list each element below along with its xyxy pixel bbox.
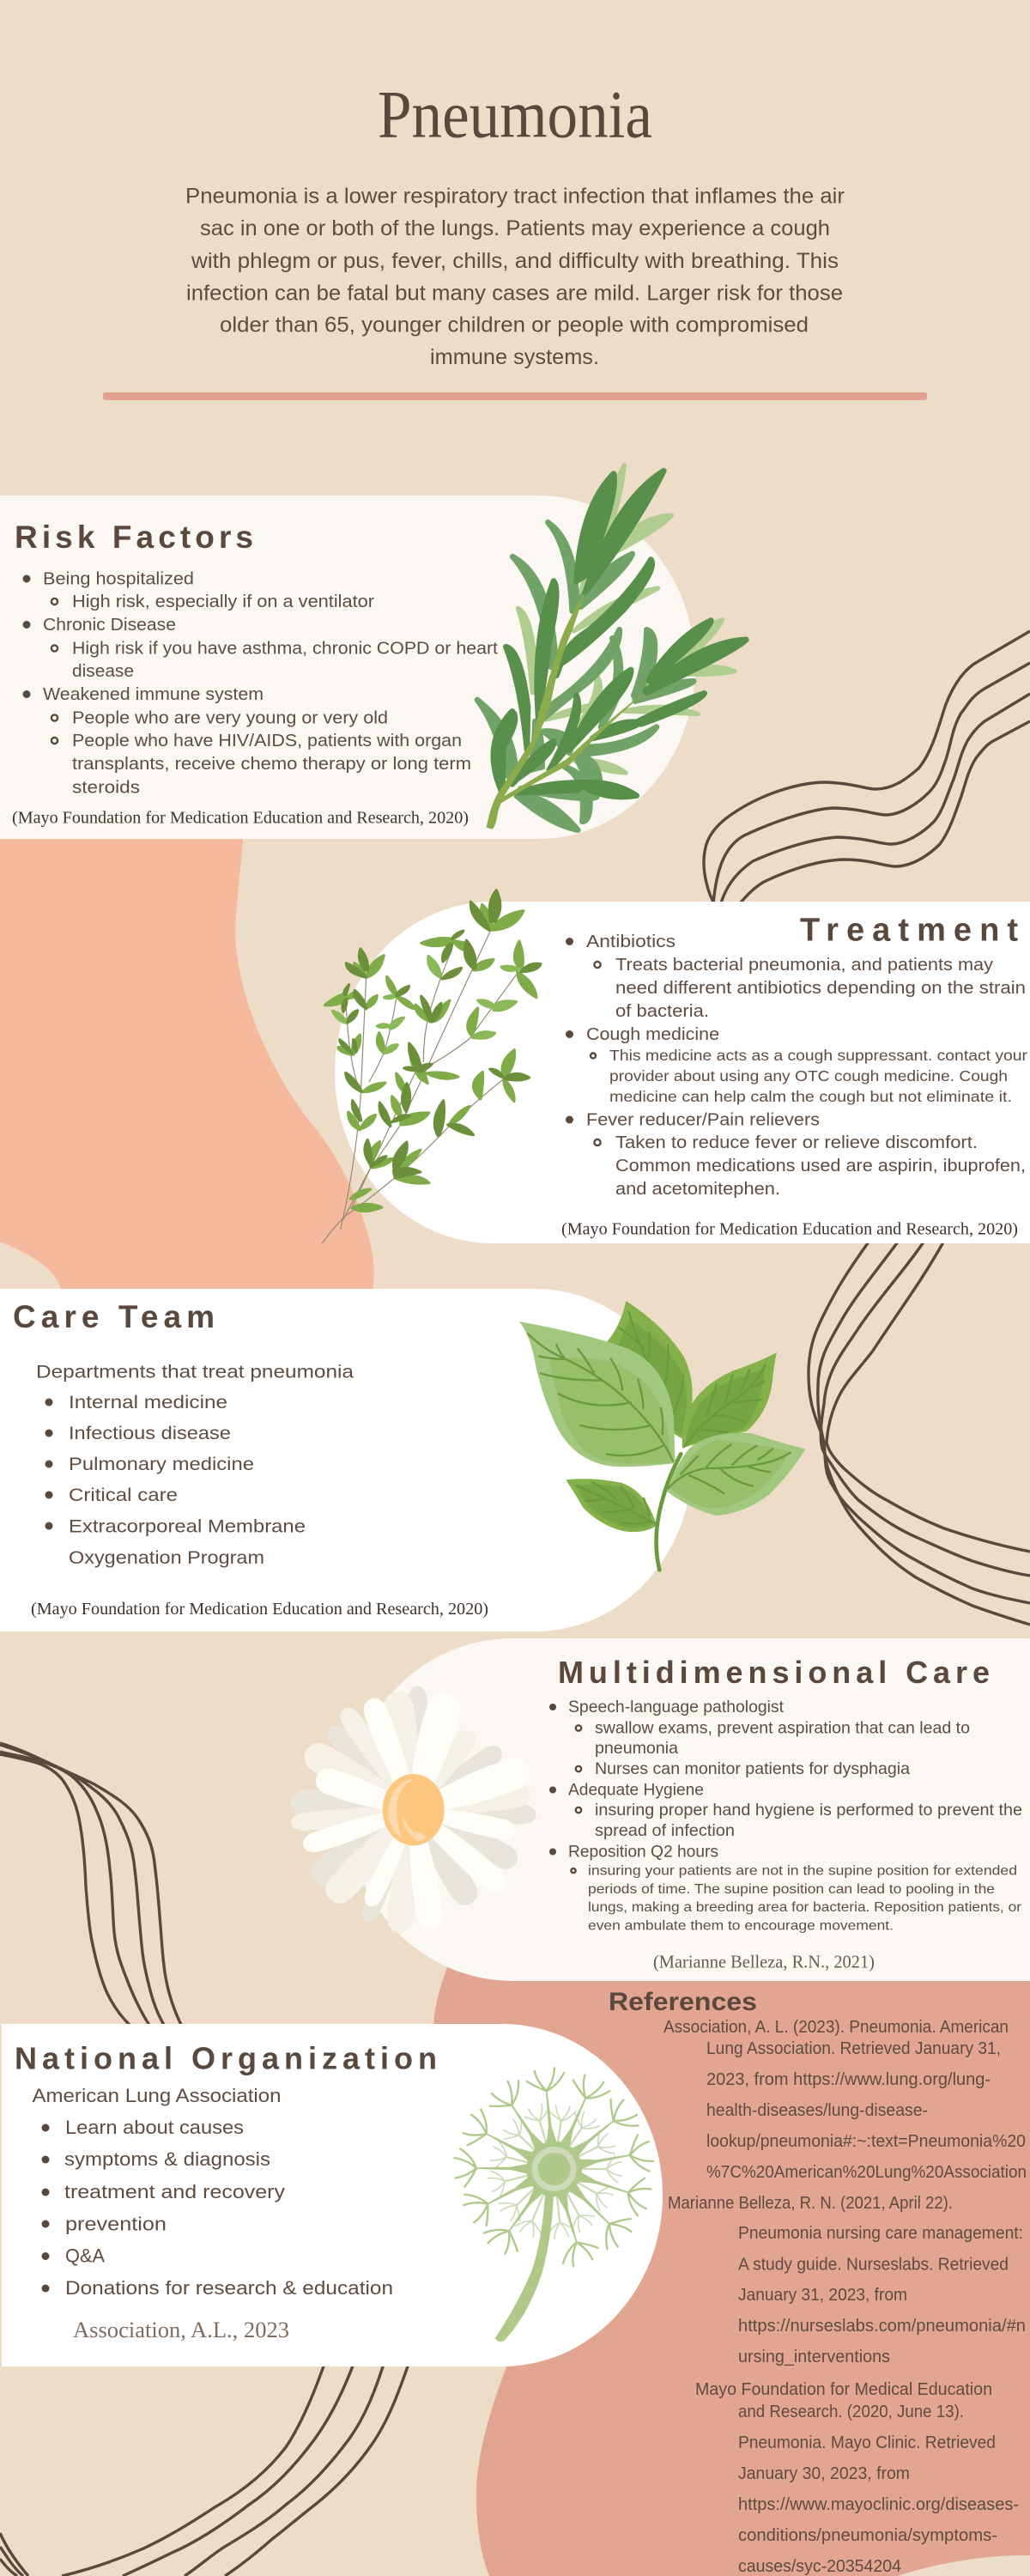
treatment list: medicine can help calm the cough but not eliminate it. [609, 1088, 1012, 1105]
care team list: Oxygenation Program [69, 1547, 264, 1568]
heading: care team: Care Team [13, 1299, 215, 1334]
multidimensional care list: Nurses can monitor patients for dysphagia [595, 1759, 910, 1778]
risk factors list: People who have HIV/AIDS, patients with organ [72, 732, 462, 750]
references list: lookup/pneumonia#:~:text=Pneumonia%20 [706, 2132, 1026, 2151]
references list: health-diseases/lung-disease- [706, 2101, 928, 2120]
intro paragraph: immune systems. [430, 345, 599, 369]
national organization list: treatment and recovery [64, 2181, 285, 2202]
heading: risk factors: Risk Factors [15, 519, 253, 555]
multidimensional care list: Speech-language pathologist [568, 1698, 785, 1716]
care team list: Critical care [69, 1485, 178, 1505]
panel: care team [0, 1289, 805, 1631]
national organization list: Learn about causes [65, 2117, 244, 2138]
risk factors list: High risk, especially if on a ventilator [72, 592, 374, 611]
decorative wavy lines: left [0, 1743, 182, 2026]
title: Pneumonia [378, 77, 652, 151]
panel background [0, 495, 695, 839]
references list: causes/syc-20354204 [738, 2557, 901, 2576]
panel: national organization [2, 2024, 663, 2366]
panel background [2, 2024, 663, 2366]
treatment list: of bacteria. [615, 1002, 709, 1021]
care team list: Departments that treat pneumonia [36, 1362, 354, 1382]
care team list: Internal medicine [69, 1392, 227, 1413]
icon: thyme sprig [322, 890, 541, 1243]
citation: national organization: Association, A.L., 2023 [73, 2318, 289, 2342]
multidimensional care list: lungs, making a breeding area for bacteria. Reposition patients, or [588, 1900, 1022, 1915]
risk factors list: People who are very young or very old [72, 709, 388, 728]
panel: multidimensional care [290, 1638, 1030, 1981]
treatment list: Cough medicine [586, 1025, 719, 1044]
treatment list: Treats bacterial pneumonia, and patients may [615, 956, 993, 975]
references list: Lung Association. Retrieved January 31, [706, 2039, 1001, 2058]
references list: ursing_interventions [738, 2348, 890, 2366]
multidimensional care list: Adequate Hygiene [568, 1781, 704, 1800]
intro paragraph: sac in one or both of the lungs. Patients may experience a cough [200, 216, 830, 240]
intro paragraph: infection can be fatal but many cases are mild. Larger risk for those [186, 282, 843, 306]
risk factors list: Chronic Disease [43, 616, 176, 635]
treatment list: Fever reducer/Pain relievers [586, 1111, 820, 1130]
risk factors list: steroids [72, 778, 140, 797]
references list: Pneumonia nursing care management: [738, 2224, 1023, 2243]
risk factors list: transplants, receive chemo therapy or long term [72, 755, 471, 774]
intro paragraph: with phlegm or pus, fever, chills, and difficulty with breathing. This [191, 249, 839, 273]
intro paragraph: older than 65, younger children or people with compromised [220, 313, 809, 337]
risk factors list: Weakened immune system [43, 685, 264, 704]
care team list: Extracorporeal Membrane [69, 1516, 306, 1537]
references list: January 31, 2023, from [738, 2286, 907, 2305]
intro paragraph: Pneumonia is a lower respiratory tract infection that inflames the air [185, 185, 845, 209]
references list: https://nurseslabs.com/pneumonia/#n [738, 2317, 1026, 2336]
panel: risk factors [0, 465, 746, 839]
citation: risk factors: (Mayo Foundation for Medication Education and Research, 2020) [12, 810, 469, 828]
references list: Mayo Foundation for Medical Education [695, 2380, 992, 2399]
decorative wavy lines: lower left [0, 2361, 409, 2576]
citation: treatment: (Mayo Foundation for Medication Education and Research, 2020) [561, 1221, 1018, 1238]
panel background [335, 902, 1030, 1243]
risk factors list [22, 570, 498, 797]
intro paragraph [185, 185, 845, 369]
national organization list: symptoms & diagnosis [64, 2148, 270, 2170]
references list: January 30, 2023, from [738, 2464, 910, 2483]
multidimensional care list: insuring proper hand hygiene is performed to prevent the [595, 1801, 1022, 1820]
multidimensional care list [549, 1698, 1022, 1934]
decorative peach blob [0, 839, 374, 1289]
national organization list: prevention [65, 2214, 167, 2235]
heading: national organization: National Organization [15, 2040, 437, 2076]
icon: rosemary sprig [477, 465, 746, 830]
heading: references: References [609, 1988, 757, 2016]
treatment list: and acetomitephen. [615, 1180, 780, 1199]
multidimensional care list: insuring your patients are not in the supine position for extended [588, 1864, 1017, 1879]
risk factors list: Being hospitalized [43, 570, 194, 589]
decorative salmon blob [433, 1958, 1030, 2576]
treatment list: provider about using any OTC cough medicine. Cough [609, 1067, 1008, 1084]
panel background [0, 1289, 693, 1631]
national organization list: Q&A [65, 2245, 105, 2267]
treatment list: need different antibiotics depending on the strain [615, 979, 1026, 998]
treatment list: Antibiotics [586, 933, 676, 951]
care team list: Infectious disease [69, 1423, 231, 1443]
multidimensional care list: spread of infection [595, 1821, 735, 1840]
care team list [36, 1362, 354, 1568]
panel background [348, 1638, 1030, 1981]
icon: dandelion [454, 2067, 655, 2342]
treatment list: Taken to reduce fever or relieve discomfort. [615, 1133, 978, 1152]
multidimensional care list: periods of time. The supine position can lead to pooling in the [588, 1882, 995, 1897]
icon: green leaves [519, 1301, 805, 1570]
citation: multidimensional care: (Marianne Belleza, R.N., 2021) [653, 1951, 875, 1971]
references list: Association, A. L. (2023). Pneumonia. American [663, 2018, 1009, 2037]
heading: treatment: Treatment [800, 913, 1018, 949]
multidimensional care list: even ambulate them to encourage movement. [588, 1918, 894, 1934]
decorative wavy lines: right middle [809, 1241, 1030, 1625]
panel: treatment [322, 890, 1030, 1243]
care team list: Pulmonary medicine [69, 1454, 254, 1474]
risk factors list: disease [72, 662, 134, 681]
treatment list: Common medications used are aspirin, ibuprofen, [615, 1157, 1026, 1176]
citation: care team: (Mayo Foundation for Medication Education and Research, 2020) [31, 1601, 488, 1619]
national organization list: American Lung Association [33, 2085, 282, 2106]
treatment list [566, 933, 1027, 1199]
treatment list: This medicine acts as a cough suppressant. contact your [609, 1047, 1027, 1064]
heading: multidimensional care: Multidimensional Care [558, 1655, 990, 1690]
references list: 2023, from https://www.lung.org/lung- [706, 2070, 991, 2089]
national organization list [33, 2085, 393, 2299]
multidimensional care list: pneumonia [595, 1739, 678, 1758]
national organization list: Donations for research & education [65, 2277, 393, 2299]
references list: Pneumonia. Mayo Clinic. Retrieved [738, 2433, 996, 2452]
references list: and Research. (2020, June 13). [738, 2403, 964, 2421]
divider [103, 392, 927, 400]
references list: https://www.mayoclinic.org/diseases- [738, 2495, 1019, 2514]
references list: A study guide. Nurseslabs. Retrieved [738, 2255, 1009, 2274]
risk factors list: High risk if you have asthma, chronic COPD or heart [72, 639, 498, 658]
references list: conditions/pneumonia/symptoms- [738, 2526, 997, 2545]
icon: daisy flower [290, 1686, 536, 1935]
decorative wavy lines: upper right [704, 631, 1030, 903]
multidimensional care list: Reposition Q2 hours [568, 1843, 718, 1862]
multidimensional care list: swallow exams, prevent aspiration that can lead to [595, 1719, 970, 1738]
references list: Marianne Belleza, R. N. (2021, April 22). [668, 2194, 953, 2213]
references list [663, 2018, 1027, 2576]
